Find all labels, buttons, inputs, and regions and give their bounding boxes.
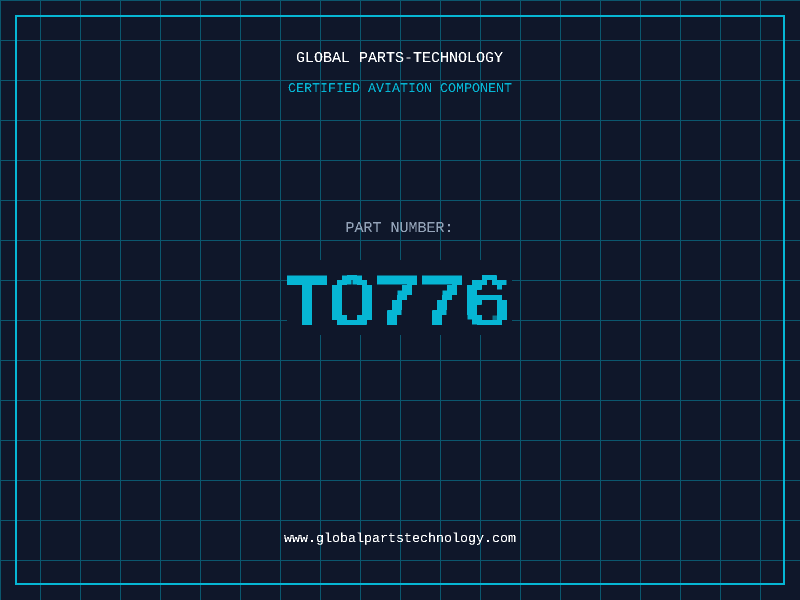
website url: www.globalpartstechnology.com [284,532,516,547]
subheading: certification: CERTIFIED AVIATION COMPONENT [288,82,512,97]
part number value: 7 [374,263,420,340]
label: part number: PART NUMBER: [345,220,454,237]
part number value: 0 [328,263,376,340]
part number value: T [286,263,328,340]
heading: company name: GLOBAL PARTS-TECHNOLOGY [296,50,503,67]
part number value: 7 [418,263,466,340]
part number value: 6 [464,263,510,340]
part number plate [287,260,512,335]
